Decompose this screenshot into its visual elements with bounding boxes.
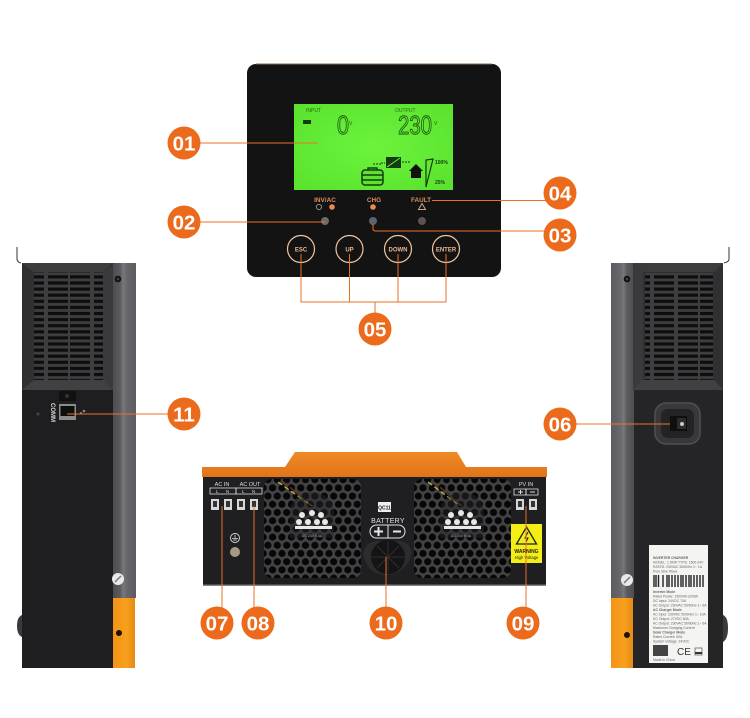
AC IN and AC OUT terminals: L: [242, 489, 245, 494]
AC IN and AC OUT terminals: [210, 482, 262, 510]
callout leader lines: [67, 143, 670, 615]
vent louvres: [34, 272, 103, 380]
button labels: ESC: [295, 248, 308, 254]
callout badge 03: [544, 218, 576, 252]
LCD digit 0: 0: [337, 110, 349, 140]
white screw: [621, 574, 633, 586]
indicator labels: INV/AC: [314, 197, 336, 204]
LCD screen: V: [434, 121, 438, 127]
callout badge 01: 01: [173, 132, 195, 156]
battery icon: [362, 168, 383, 185]
callout badge 02: 02: [173, 212, 195, 234]
panel: bottom rear unit: [202, 452, 547, 585]
callout badge 09: [506, 606, 540, 640]
indicator labels: FAULT: [411, 197, 431, 204]
PV IN terminals: [514, 482, 538, 510]
load bar: 100%: [435, 160, 448, 166]
callout badge 03: 03: [549, 224, 571, 248]
product label: INVERTER CHARGER: [653, 556, 689, 560]
mount and COMM port: [36, 391, 85, 422]
button labels: [295, 248, 457, 254]
battery cable gland: [363, 540, 412, 575]
house icon: [409, 164, 423, 178]
product label: AC Charger Mode: [653, 608, 682, 612]
LCD screen: V: [349, 121, 353, 127]
panel: left side unit: [17, 247, 136, 668]
right fan: DC 24V 0.4A: [451, 534, 472, 538]
fuse badge and BATTERY terminals: BATTERY: [371, 518, 405, 525]
indicator LEDs: [316, 204, 426, 225]
warning label: [511, 524, 542, 563]
panel: right side unit: [611, 247, 729, 668]
AC IN and AC OUT terminals: N: [252, 489, 255, 494]
callout badge 10: 10: [375, 612, 397, 636]
left fan: DC 24V 0.4A: [302, 534, 323, 538]
product label: Inverter Mode: [653, 590, 675, 594]
warning label: WARNING: [514, 549, 539, 555]
LCD screen: OUTPUT: [395, 108, 416, 114]
callout badge 04: 04: [549, 182, 572, 206]
product label: RATED: 230VAC 50/60Hz 1~ 1A: [653, 565, 703, 569]
button labels: UP: [345, 248, 354, 254]
product label: AC Output: 230VAC 50/60Hz 1~ 6A: [653, 622, 707, 626]
AC IN and AC OUT terminals: L: [216, 489, 219, 494]
warning label: High Voltage: [515, 555, 539, 560]
product label: DC Output: 27VDC 60A: [653, 617, 690, 621]
callout badge 01: [168, 126, 200, 160]
AC IN and AC OUT terminals: N: [226, 489, 229, 494]
callout badge 05: [358, 312, 392, 346]
callout badge 02: [168, 206, 200, 238]
callout badge 07: [200, 606, 234, 640]
callout badge 08: 08: [247, 612, 269, 636]
load bar: 25%: [435, 180, 446, 186]
LCD screen: [294, 104, 453, 190]
LCD screen: INPUT: [306, 108, 321, 114]
product label: Maximum Charging Current: [653, 626, 695, 630]
indicator labels: CHG: [367, 197, 381, 204]
button labels: ENTER: [436, 248, 457, 254]
indicator labels: [314, 197, 431, 204]
orange top cover: [202, 452, 547, 477]
rocker switch: [655, 403, 700, 444]
left fan: [264, 479, 361, 578]
certification marks: CE: [677, 647, 691, 658]
product label: DC Input: 24VDC 70A: [653, 599, 687, 603]
fuse badge and BATTERY terminals: QC11: [378, 506, 391, 512]
callout badge 09: 09: [512, 612, 534, 636]
AC IN and AC OUT terminals: AC OUT: [240, 482, 261, 488]
product label: Solar Charger Mode: [653, 630, 685, 634]
certification marks: Made in China: [653, 658, 675, 662]
callout badge 06: [544, 408, 576, 440]
inverter icon: [373, 157, 411, 168]
callout badge 11: [168, 398, 200, 430]
product label: MODEL: 1.5KW TYPE: 1500-24V: [653, 560, 704, 564]
callout badge 11: 11: [173, 404, 195, 426]
buttons: [288, 236, 460, 262]
callout badge 05: 05: [364, 318, 386, 342]
load bar: [426, 159, 448, 187]
button labels: DOWN: [388, 248, 408, 254]
callout badge 04: [544, 176, 576, 210]
product label: Rated Current: 60A: [653, 635, 683, 639]
callout badge 08: [242, 606, 274, 640]
product label: AC Input: 230VAC 50/60Hz 1~ 10A: [653, 612, 707, 616]
barcode: [654, 575, 703, 587]
mount and COMM port: COMM: [49, 403, 55, 422]
panel: front control panel: [247, 64, 501, 277]
vent louvres: [645, 273, 713, 380]
LCD digits 230: 230: [398, 110, 432, 140]
body: [203, 477, 546, 585]
product label: [649, 545, 708, 663]
right fan: [414, 479, 511, 578]
PV IN terminals: PV IN: [519, 482, 533, 488]
callout badge 06: 06: [549, 414, 571, 436]
product label: System Voltage: 24VDC: [653, 640, 690, 644]
certification marks: [653, 645, 702, 662]
white screw: [112, 573, 124, 585]
product label: Rated Power: 1500VA/1200W: [653, 594, 699, 598]
product label: Pure Sine Wave: [653, 570, 677, 574]
callout badge 10: [370, 606, 402, 640]
AC IN and AC OUT terminals: AC IN: [215, 482, 229, 488]
fuse badge and BATTERY terminals: [370, 502, 405, 538]
product label: AC Output: 230VAC 50/60Hz 1~ 6A: [653, 604, 707, 608]
ground symbol and bolt: [230, 534, 240, 557]
callout badge 07: 07: [206, 612, 228, 636]
